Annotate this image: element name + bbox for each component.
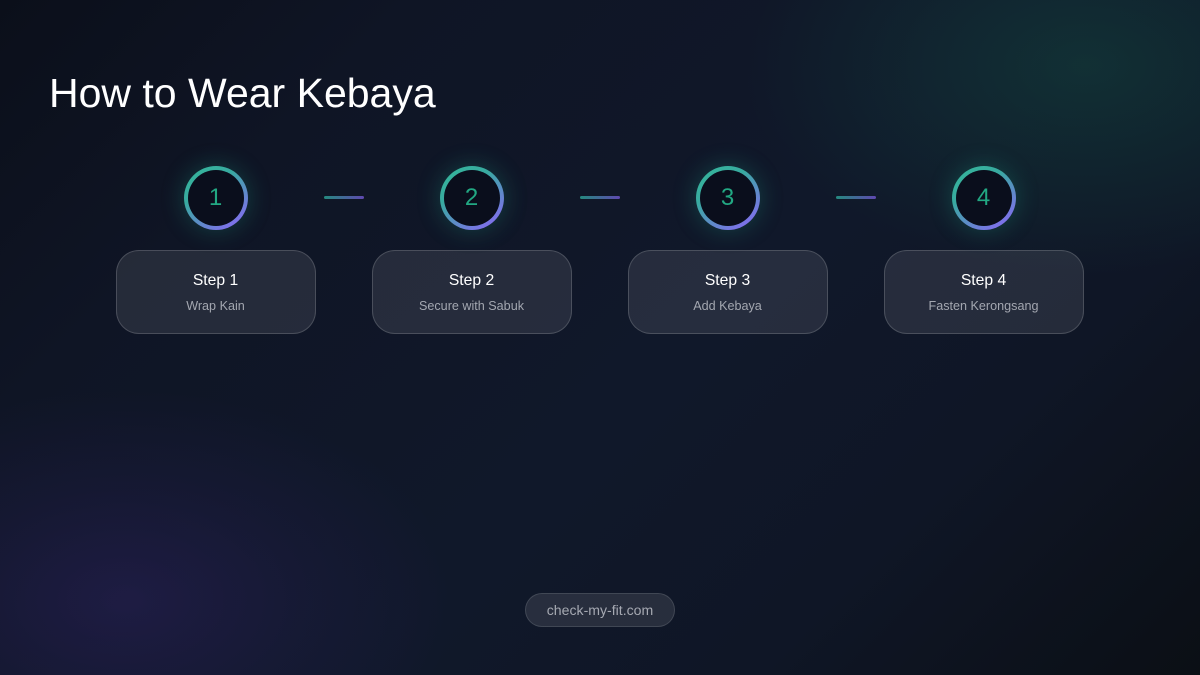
- step 4 number circle: 4: [977, 184, 990, 211]
- panel: step 4 card: Step 4: [961, 272, 1006, 289]
- panel: step 4 card: Fasten Kerongsang: [929, 299, 1038, 313]
- connector arrow 2: [580, 196, 620, 199]
- panel: step 4 card: [884, 250, 1084, 334]
- step 3 number circle: 3: [721, 184, 734, 211]
- step 3 number circle: [696, 166, 760, 230]
- panel: step 2 card: [372, 250, 572, 334]
- step 1 number circle: [184, 166, 248, 230]
- panel: step 1 card: Step 1: [193, 272, 238, 289]
- panel: step 2 card: Step 2: [449, 272, 494, 289]
- step 4 number circle: [952, 166, 1016, 230]
- step 1 number circle: 1: [209, 184, 222, 211]
- footer website badge: check-my-fit.com: [547, 602, 653, 618]
- panel: step 2 card: Secure with Sabuk: [419, 299, 524, 313]
- step 2 number circle: 2: [465, 184, 478, 211]
- connector arrow 1: [324, 196, 364, 199]
- footer website badge: [525, 593, 675, 627]
- panel: step 1 card: Wrap Kain: [186, 299, 245, 313]
- panel: step 3 card: [628, 250, 828, 334]
- connector arrow 3: [836, 196, 876, 199]
- panel: step 3 card: Step 3: [705, 272, 750, 289]
- step 2 number circle: [440, 166, 504, 230]
- panel: step 1 card: [116, 250, 316, 334]
- title: How to Wear Kebaya: [49, 70, 436, 116]
- panel: step 3 card: Add Kebaya: [693, 299, 762, 313]
